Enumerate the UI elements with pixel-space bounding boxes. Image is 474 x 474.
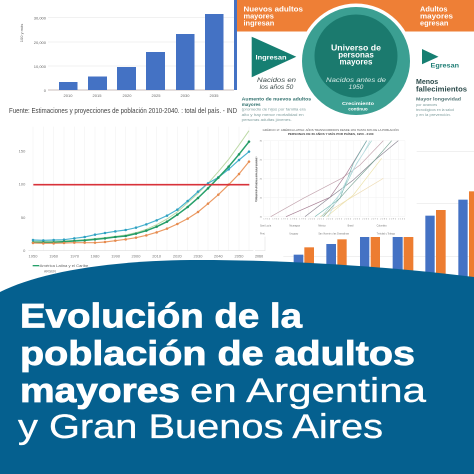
- bar chart: blue and orange comparison: [255, 151, 474, 281]
- bar chart: population 100 and over: 2030: [181, 93, 190, 98]
- central circle: Universo de: [331, 44, 382, 52]
- x axis labels: 2040: [214, 253, 224, 258]
- y axis title: Población de 60 años y más (en porcentaje): [255, 156, 258, 202]
- legend: México: [318, 225, 326, 227]
- text: fewer deaths: fallecimientos: [416, 86, 467, 94]
- x axis labels: 2050: [235, 253, 244, 258]
- x axis labels: 1960: [49, 253, 59, 258]
- axis labels: 15: [260, 197, 263, 199]
- text: greater longevity: tecnológicos en la salud: [416, 107, 454, 112]
- heading: older adults leave: mayores: [420, 12, 453, 20]
- text: increase of new older adults: mayores: [242, 102, 261, 107]
- blue title banner: [0, 260, 474, 474]
- y axis labels: [19, 148, 26, 253]
- legend: Uruguay: [289, 233, 299, 236]
- central circle: personas: [338, 50, 374, 60]
- heading: new older adults enter: ingresan: [244, 18, 275, 28]
- axis labels: [260, 141, 263, 219]
- x axis labels: 1980: [91, 253, 100, 258]
- axis labels: 25: [260, 160, 263, 162]
- axis labels: 20: [260, 179, 263, 181]
- bar chart: population 100 and over: 2035: [210, 93, 219, 98]
- text: born in the fifties: [257, 77, 296, 91]
- bar chart: population 100 and over: [19, 0, 237, 98]
- y axis labels: 100: [19, 182, 26, 187]
- y axis labels: 150: [19, 148, 26, 153]
- reference line at 100: [33, 182, 249, 187]
- chart title: GRÁFICO 17. AMÉRICA LATINA: AÑOS TRANSCURRIDOS DESDE 10% HASTA 30% DE LA POBLACIÓN: [263, 129, 399, 132]
- legend: Nicaragua: [289, 224, 301, 227]
- bar chart: population 100 and over: 2020: [123, 93, 132, 98]
- text: fewer deaths: Menos: [416, 79, 438, 86]
- partial chart fragment: 2060: [255, 254, 263, 258]
- x axis labels: [29, 253, 244, 258]
- y axis labels: 0: [23, 248, 26, 253]
- heading: new older adults enter: [244, 4, 303, 28]
- legend: América Latina y el Caribe: [40, 263, 89, 268]
- orange header band: [237, 0, 474, 32]
- x axis labels: 1970: [70, 253, 80, 258]
- title: y Gran Buenos Aires: [18, 408, 383, 446]
- title: en Argentina: [190, 372, 426, 410]
- icon: entering triangle: Ingresan: [256, 54, 286, 62]
- legend: [260, 224, 396, 236]
- central circle: 1950: [349, 84, 364, 91]
- legend: Brasil: [348, 224, 354, 227]
- heading: new older adults enter: Nuevos adultos: [244, 4, 303, 14]
- heading: older adults leave: Adultos: [420, 4, 448, 14]
- legend: ARGEN: [44, 270, 56, 274]
- x axis labels: 1950: [29, 253, 38, 258]
- central circle: continuo: [348, 106, 368, 112]
- x axis labels: 2000: [132, 253, 141, 258]
- text: increase of new older adults: alto y hay menor mortalidad en: [242, 112, 304, 117]
- legend: Perú: [260, 233, 266, 236]
- line: light green series: [33, 131, 249, 241]
- bar chart: population 100 and over: 20,000: [34, 40, 47, 45]
- y axis labels: 50: [21, 215, 26, 220]
- text: greater longevity: y en la prevención.: [416, 112, 451, 117]
- partial chart fragment: [255, 237, 265, 258]
- x axis labels: 2010: [152, 253, 162, 258]
- text: increase of new older adults: Aumento de nuevos adultos: [242, 96, 312, 102]
- title: [18, 298, 426, 446]
- line chart: people aged 60 and over by country: 1950 1960 1970 1980 1990 2000 2010 2020 2030 2040 2050 2060 2070 2080 2090 2100: [263, 219, 406, 221]
- title: mayores: [20, 372, 180, 410]
- title: Evolución de la: [20, 298, 303, 336]
- axis labels: 30: [260, 141, 263, 143]
- central circle: [298, 4, 414, 118]
- line: green series: [33, 142, 249, 242]
- rotated axis note: Índice de envejecimiento por países: [255, 157, 259, 201]
- x axis labels: 1990: [111, 253, 121, 258]
- central circle: mayores: [340, 58, 373, 66]
- line: cyan series: [33, 152, 249, 240]
- text: born in the fifties: Nacidos en: [257, 77, 296, 84]
- central circle: Crecimiento: [342, 101, 374, 106]
- legend: [33, 263, 89, 274]
- text: fewer deaths: [416, 79, 467, 94]
- legend: San Vicente y las Granadinas: [318, 233, 350, 236]
- bar chart: population 100 and over: 2010: [64, 93, 73, 98]
- heading: older adults leave: [420, 4, 453, 28]
- text: born in the fifties: los años 50: [260, 84, 294, 91]
- text: increase of new older adults: [242, 96, 312, 122]
- legend: Sant Lucía: [260, 224, 272, 227]
- bar chart: population 100 and over: 30,000: [34, 16, 47, 20]
- central circle: Nacidos antes de: [326, 77, 386, 84]
- axis labels: 10: [260, 217, 263, 219]
- text: greater longevity: por avances: [416, 102, 437, 107]
- chart title: PERSONAS DE 60 AÑOS Y MÁS POR PAÍSES, 1950 - 2100: [288, 131, 374, 136]
- country series: [271, 141, 398, 217]
- bar chart: population 100 and over: 2025: [152, 93, 161, 98]
- line: orange series: [33, 162, 249, 243]
- legend: Colombia: [377, 225, 387, 227]
- line chart: people aged 60 and over by country: [255, 129, 406, 236]
- bar chart: population 100 and over: 2015: [93, 93, 102, 98]
- chart title: [263, 129, 399, 136]
- bar chart: population 100 and over: 100 y más: [19, 24, 24, 42]
- heading: older adults leave: egresan: [420, 18, 449, 28]
- panel: diagram of older adults universe: [237, 0, 474, 122]
- title: población de adultos: [20, 335, 415, 373]
- icon: leaving triangle: Egresan: [430, 62, 459, 70]
- icon: leaving triangle: [422, 49, 459, 70]
- bar chart: population 100 and over: 10,000: [34, 64, 47, 69]
- text: increase of new older adults: personas adultas jóvenes.: [242, 117, 292, 122]
- text: greater longevity: Mayor longevidad: [416, 96, 461, 102]
- icon: entering triangle: [252, 37, 296, 77]
- line chart: ageing index 1950-2055: [19, 127, 259, 274]
- legend: Trinidad y Tobago: [377, 233, 396, 236]
- text: greater longevity: [416, 96, 461, 117]
- text: increase of new older adults: (promedio de hijos por familia era: [242, 106, 307, 112]
- bar chart: population 100 and over: 0: [44, 88, 47, 93]
- source caption: Fuente: Estimaciones y proyecciones de población 2010-2040. : total del país. - IND: [9, 106, 237, 115]
- x axis labels: 2020: [173, 253, 183, 258]
- x axis labels: 2030: [194, 253, 203, 258]
- heading: new older adults enter: mayores: [244, 12, 274, 20]
